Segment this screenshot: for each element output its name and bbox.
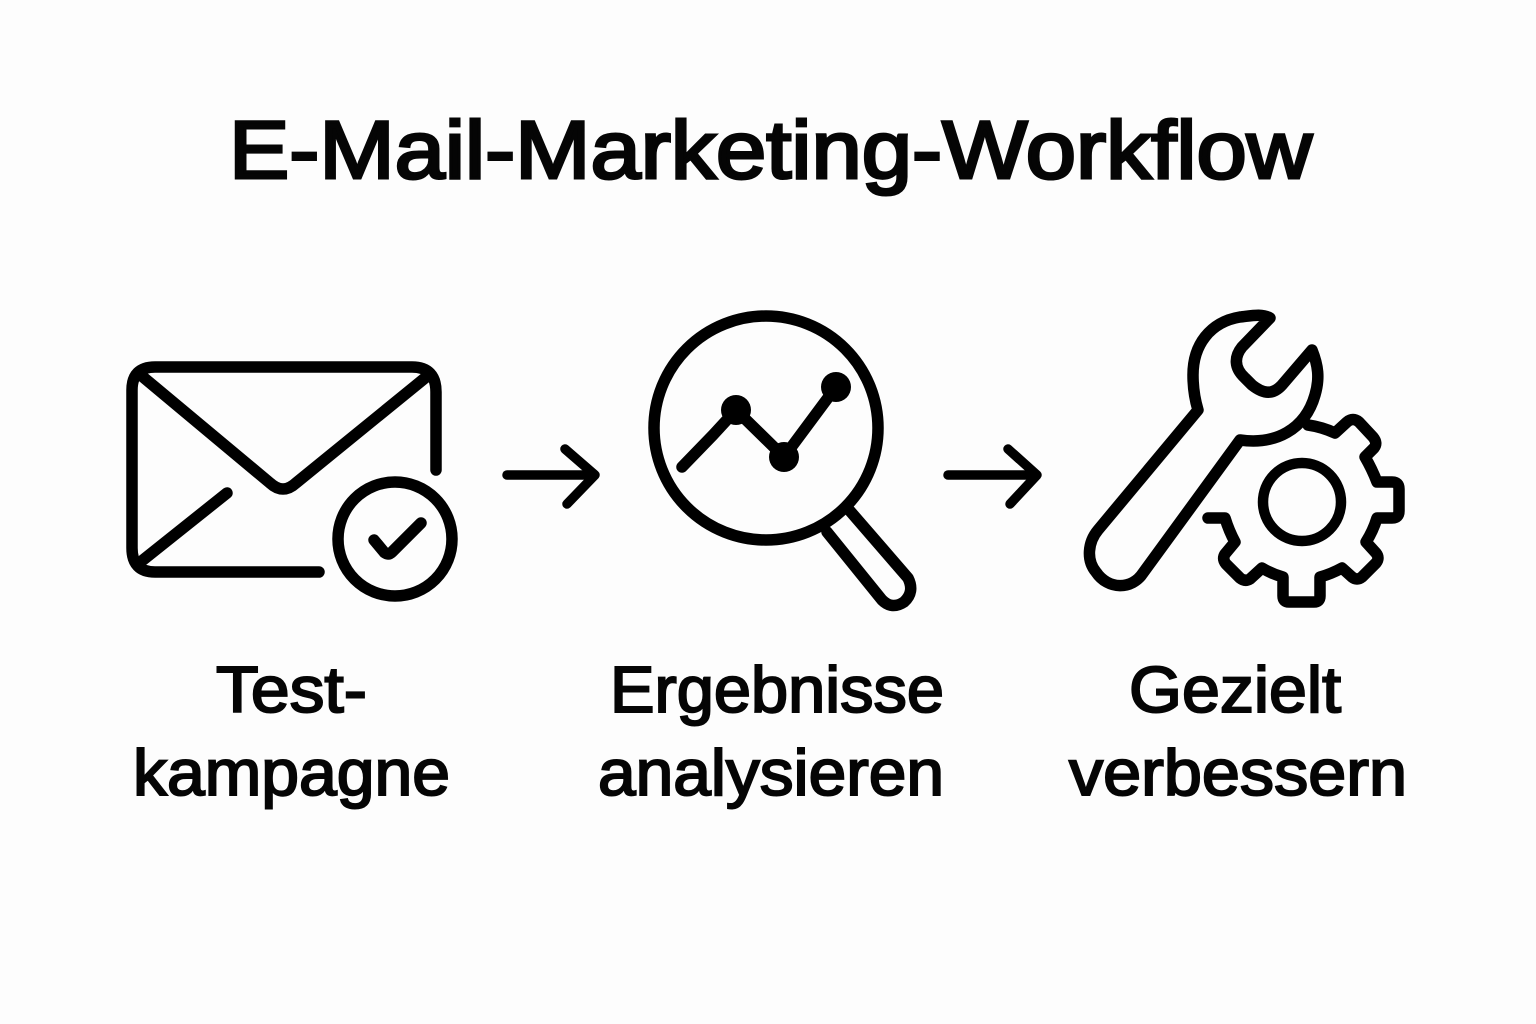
icon: envelope with check mark — [132, 367, 452, 596]
arrow: step 1 to step 2 — [507, 449, 595, 504]
arrow: step 2 to step 3 — [948, 449, 1037, 504]
label: Test-Kampagne: kampagne — [133, 736, 450, 809]
label: Test-Kampagne: Test- — [216, 653, 367, 726]
label: Gezielt verbessern: Gezielt — [1129, 653, 1341, 726]
icon: magnifying glass with line chart — [654, 316, 911, 606]
label: Gezielt verbessern: verbessern — [1069, 736, 1407, 809]
label: Ergebnisse analysieren: analysieren — [598, 736, 944, 809]
label: Test-Kampagne — [133, 653, 450, 809]
title: E-Mail-Marketing-Workflow — [229, 105, 1313, 196]
label: Gezielt verbessern — [1069, 653, 1407, 809]
label: Ergebnisse analysieren: Ergebnisse — [610, 653, 944, 726]
label: Ergebnisse analysieren — [598, 653, 944, 809]
icon: wrench and gear — [1089, 315, 1399, 602]
